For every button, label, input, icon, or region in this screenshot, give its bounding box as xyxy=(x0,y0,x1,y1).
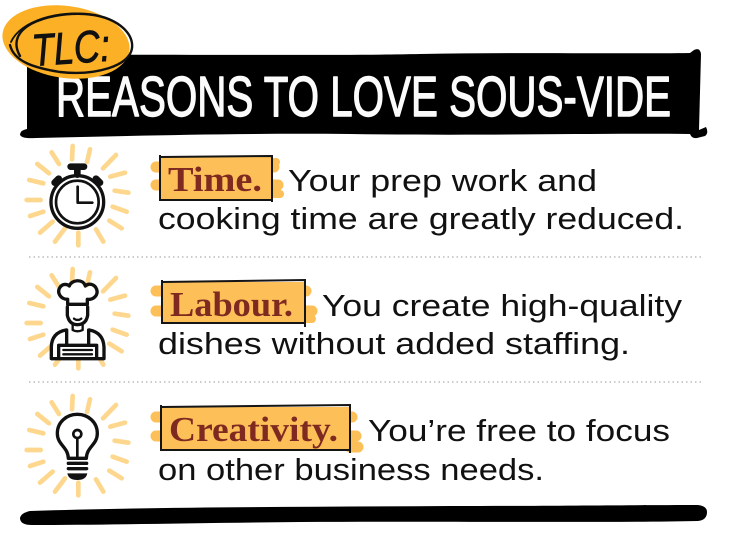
text: time body: Your prep work and xyxy=(288,163,597,198)
icon: light bulb xyxy=(27,396,128,495)
text: time body: cooking time are greatly reduced. xyxy=(158,201,684,236)
highlight: Time xyxy=(156,155,280,202)
bottom brush bar xyxy=(20,505,707,525)
icon: chef xyxy=(27,269,128,368)
icon: stopwatch xyxy=(27,146,128,245)
highlight: Time: Time. xyxy=(168,160,262,199)
highlight: Labour xyxy=(156,280,312,327)
title banner xyxy=(20,49,707,138)
row: time xyxy=(27,146,684,245)
text: time body xyxy=(158,163,684,236)
text: labour body: You create high-quality xyxy=(322,288,683,323)
row: labour xyxy=(27,269,683,368)
badge text: TLC: xyxy=(30,20,112,76)
text: labour body xyxy=(158,288,683,361)
row: creativity xyxy=(27,396,670,495)
text: creativity body xyxy=(158,413,670,487)
highlight: Creativity xyxy=(156,405,358,453)
badge: TLC xyxy=(0,0,134,87)
text: labour body: dishes without added staffing. xyxy=(158,326,630,361)
highlight: Creativity: Creativity. xyxy=(169,410,338,449)
highlight: Labour: Labour. xyxy=(170,285,293,324)
text: creativity body: You’re free to focus xyxy=(368,413,670,448)
text: creativity body: on other business needs. xyxy=(158,452,544,487)
